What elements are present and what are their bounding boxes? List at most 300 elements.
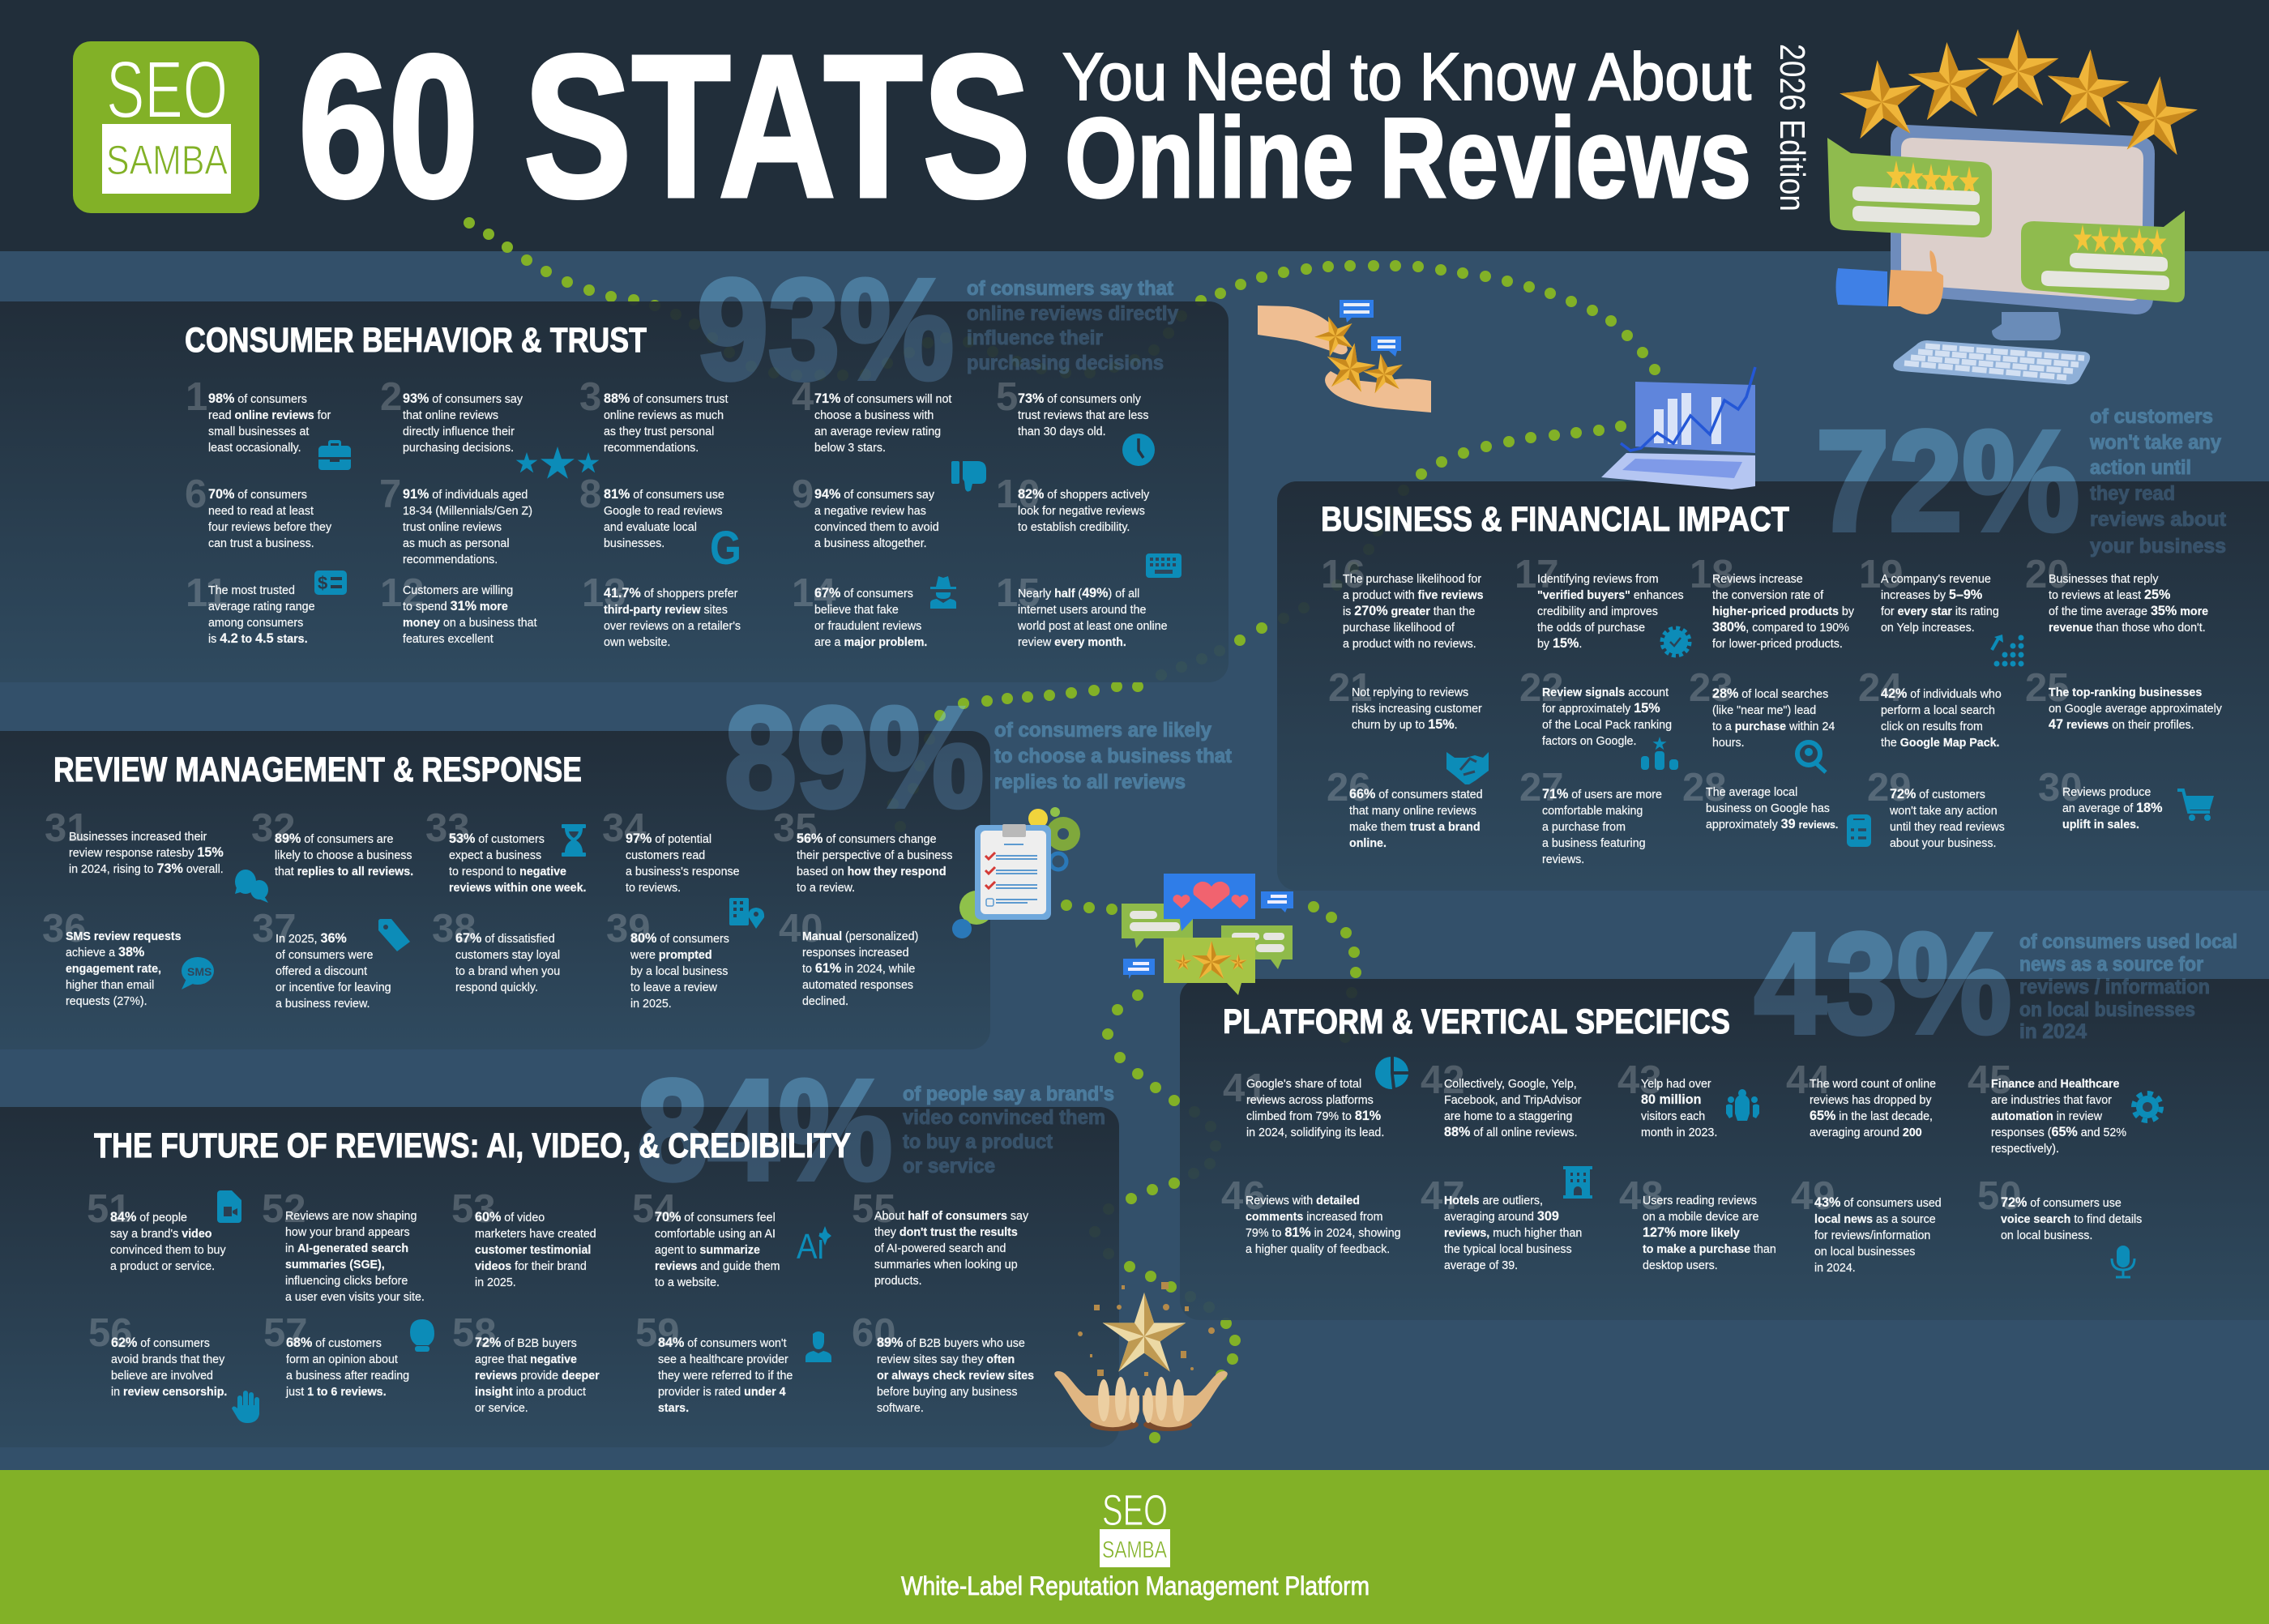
- big stat 84%: of people say a brand's: [903, 1083, 1114, 1105]
- stat 56: believe are involved: [111, 1369, 213, 1383]
- big stat 93%: [697, 250, 1178, 409]
- stat 27: reviews.: [1542, 853, 1584, 866]
- stat 47: reviews, much higher than: [1444, 1226, 1582, 1240]
- stat 4: choose a business with: [814, 408, 934, 422]
- stat 18: 18: [1690, 553, 1734, 596]
- icon: hotel: [1563, 1166, 1592, 1199]
- big stat 43%: in 2024: [2019, 1020, 2087, 1043]
- icon: price list: [314, 571, 347, 595]
- stat 53: 60% of video: [475, 1209, 545, 1224]
- stat 48: on a mobile device are: [1643, 1210, 1758, 1224]
- stat 45: responses (65% and 52%: [1991, 1124, 2126, 1139]
- big stat 43%: of consumers used local: [2019, 930, 2237, 953]
- stat 53: in 2025.: [475, 1276, 516, 1289]
- stat 2: [380, 375, 523, 455]
- stat 37: [252, 915, 397, 1012]
- stat 1: read online reviews for: [208, 408, 331, 422]
- stat 48: [1619, 1182, 1783, 1274]
- stat 39: 80% of consumers: [630, 930, 729, 946]
- stat 16: purchase likelihood of: [1343, 621, 1455, 635]
- heading: business impact: BUSINESS & FINANCIAL IMPACT: [1321, 500, 1789, 539]
- panel: future of reviews: [0, 1107, 1119, 1447]
- stat 60: 89% of B2B buyers who use: [877, 1335, 1025, 1350]
- stat 2: purchasing decisions.: [403, 441, 514, 455]
- stat 6: 70% of consumers: [208, 486, 307, 502]
- icon: local search: [1797, 742, 1826, 772]
- stat 50: voice search to find details: [2001, 1212, 2142, 1226]
- stat 17: "verified buyers" enhances: [1537, 588, 1684, 602]
- icon: spy: [930, 576, 956, 609]
- stat 14: or fraudulent reviews: [814, 619, 921, 633]
- stat 36: achieve a 38%: [66, 944, 144, 959]
- stat 38: to a brand when you: [455, 964, 560, 978]
- illustration: clipboard with gears: [952, 807, 1080, 938]
- stat 40: automated responses: [802, 978, 913, 992]
- stat 19: A company's revenue: [1881, 572, 1991, 586]
- big stat 43%: on local businesses: [2019, 998, 2195, 1021]
- stat 42: 42: [1421, 1058, 1465, 1102]
- stat 23: (like "near me") lead: [1712, 703, 1816, 717]
- stat 36: engagement rate,: [66, 962, 161, 976]
- logo: SAMBA: [106, 137, 228, 183]
- stat 18: Reviews increase: [1712, 572, 1803, 586]
- stat 58: [452, 1319, 606, 1417]
- stat 18: higher-priced products by: [1712, 605, 1854, 618]
- stat 60: [852, 1319, 1042, 1417]
- stat 35: their perspective of a business: [797, 848, 952, 862]
- icon: shopping cart: [2177, 790, 2214, 821]
- stat 45: Finance and Healthcare: [1991, 1077, 2119, 1091]
- stat 56: 62% of consumers: [111, 1335, 210, 1350]
- stat 59: they were referred to if the: [658, 1369, 793, 1383]
- stat 36: requests (27%).: [66, 994, 147, 1008]
- review bubble right: [2021, 211, 2185, 302]
- stat 25: 25: [2025, 666, 2070, 710]
- icon: keyboard: [1146, 553, 1182, 578]
- stat 49: in 2024.: [1814, 1261, 1856, 1275]
- stat 49: local news as a source: [1814, 1212, 1936, 1226]
- stat 15: world post at least one online: [1018, 619, 1168, 633]
- stat 24: perform a local search: [1881, 703, 1995, 717]
- stat 16: a product with five reviews: [1343, 588, 1483, 602]
- icon: price list: $: [318, 573, 327, 593]
- illustration: computer with reviews: [1827, 29, 2201, 384]
- stat 29: 29: [1867, 766, 1912, 810]
- stat 51: 51: [87, 1187, 131, 1231]
- stat 27: [1519, 766, 1662, 866]
- stat 36: SMS review requests: [66, 930, 182, 943]
- stat 40: responses increased: [802, 946, 909, 959]
- stat 27: 27: [1519, 766, 1564, 810]
- stat 21: [1328, 666, 1482, 732]
- big stat 72%: your business: [2090, 535, 2226, 558]
- stat 3: as they trust personal: [604, 425, 714, 438]
- stat 14: are a major problem.: [814, 635, 927, 649]
- stat 7: [379, 472, 532, 566]
- stat 39: in 2025.: [630, 997, 672, 1011]
- illustration: feedback bubbles: [1122, 874, 1293, 995]
- stat 41: reviews across platforms: [1246, 1093, 1374, 1107]
- stat 14: 14: [792, 571, 836, 615]
- icon: thumbs down: [951, 461, 986, 492]
- stat 39: [606, 915, 734, 1012]
- stat 51: say a brand's video: [110, 1227, 212, 1241]
- stat 34: to reviews.: [626, 881, 681, 895]
- stat 10: 10: [996, 472, 1040, 516]
- stat 55: About half of consumers say: [874, 1209, 1028, 1223]
- stat 11: among consumers: [208, 616, 303, 630]
- stat 41: climbed from 79% to 81%: [1246, 1108, 1381, 1123]
- stat 35: 56% of consumers change: [797, 831, 937, 846]
- stat 59: 59: [635, 1311, 680, 1355]
- stat 42: [1421, 1066, 1588, 1141]
- icons: consumer behavior: [314, 434, 1182, 609]
- stat 43: month in 2023.: [1641, 1126, 1717, 1139]
- big stat 72%: reviews about: [2090, 508, 2227, 531]
- stat 12: Customers are willing: [403, 583, 513, 597]
- big stat 93%: of consumers say that: [967, 277, 1174, 300]
- stat 35: to a review.: [797, 881, 855, 895]
- icon: briefcase: [318, 440, 351, 470]
- stat 8: businesses.: [604, 536, 664, 550]
- stat 15: [996, 571, 1168, 649]
- stat 47: 47: [1421, 1174, 1465, 1218]
- stat 15: 15: [996, 571, 1040, 615]
- stat 44: [1786, 1066, 1942, 1141]
- stat 13: [582, 571, 741, 649]
- stat 3: recommendations.: [604, 441, 699, 455]
- stat 10: 82% of shoppers actively: [1018, 486, 1149, 502]
- stat 15: review every month.: [1018, 635, 1126, 649]
- stat 13: 41.7% of shoppers prefer: [604, 585, 737, 600]
- stat 11: [186, 571, 315, 646]
- stat 49: [1791, 1182, 1948, 1276]
- stat 39: to leave a review: [630, 981, 717, 994]
- stat 52: a user even visits your site.: [285, 1290, 425, 1304]
- stat 5: 73% of consumers only: [1018, 391, 1141, 406]
- stat 24: 24: [1858, 666, 1903, 710]
- stat 50: [1977, 1182, 2149, 1244]
- stat 20: Businesses that reply: [2049, 572, 2158, 586]
- stat 26: 26: [1327, 766, 1371, 810]
- stat 46: comments increased from: [1246, 1210, 1382, 1224]
- icon: gear: [2134, 1093, 2161, 1121]
- stat 55: they don't trust the results: [874, 1225, 1018, 1239]
- stat 53: [451, 1195, 603, 1291]
- stat 29: [1867, 774, 2010, 852]
- stat 57: [263, 1319, 416, 1400]
- stat 52: [262, 1195, 432, 1306]
- stat 44: 44: [1786, 1058, 1831, 1102]
- stars above the monitor: [1836, 29, 2201, 156]
- stat 26: make them trust a brand: [1349, 820, 1481, 834]
- stat 19: on Yelp increases.: [1881, 621, 1975, 635]
- stat 55: of AI-powered search and: [874, 1242, 1006, 1255]
- stat 1: 1: [186, 375, 207, 419]
- stat 54: 54: [632, 1187, 677, 1231]
- stat 60: software.: [877, 1401, 924, 1415]
- monitor: [1891, 125, 2155, 314]
- stat 16: 16: [1321, 553, 1365, 596]
- stat 25: [2025, 666, 2222, 732]
- stat 45: [1968, 1066, 2134, 1157]
- stat 31: in 2024, rising to 73% overall.: [69, 861, 224, 876]
- stat 26: that many online reviews: [1349, 804, 1476, 818]
- stat 43: 80 million: [1641, 1092, 1702, 1107]
- icon: video file: [217, 1190, 241, 1223]
- stat 5: trust reviews that are less: [1018, 408, 1149, 422]
- logo: [73, 41, 259, 213]
- big stat 84%: 84%: [637, 1051, 892, 1210]
- stat 24: click on results from: [1881, 720, 1983, 733]
- stat 23: 28% of local searches: [1712, 686, 1828, 701]
- stat 53: videos for their brand: [475, 1259, 587, 1273]
- stat 50: 72% of consumers use: [2001, 1194, 2122, 1210]
- stat 56: in review censorship.: [111, 1385, 227, 1399]
- icon: chat bubbles: [235, 870, 268, 903]
- icon: handshake: [1446, 752, 1489, 784]
- stat 27: a purchase from: [1542, 820, 1626, 834]
- stat 56: avoid brands that they: [111, 1353, 224, 1366]
- stat 12: features excellent: [403, 632, 494, 646]
- stat 18: for lower-priced products.: [1712, 637, 1843, 651]
- stat 8: 81% of consumers use: [604, 486, 724, 502]
- stat 20: [2025, 553, 2208, 635]
- thumbs up hand: [1836, 250, 1943, 314]
- stat 6: [185, 472, 332, 550]
- stat 56: 56: [88, 1311, 133, 1355]
- dotted path: [464, 217, 1660, 1443]
- stat 48: desktop users.: [1643, 1259, 1718, 1272]
- stat 21: 21: [1328, 666, 1373, 710]
- stat 11: is 4.2 to 4.5 stars.: [208, 630, 308, 646]
- big stat 72%: action until: [2090, 456, 2191, 479]
- icon: pie chart: [1375, 1057, 1408, 1089]
- stat 6: can trust a business.: [208, 536, 314, 550]
- stat 12: money on a business that: [403, 616, 537, 630]
- stat 39: were prompted: [630, 948, 712, 962]
- heading: consumer behavior: CONSUMER BEHAVIOR & TRUST: [185, 321, 647, 360]
- stat 41: Google's share of total: [1246, 1077, 1361, 1091]
- stat 51: 84% of people: [110, 1209, 187, 1224]
- stat 30: 30: [2038, 766, 2083, 810]
- stat 34: 34: [602, 806, 647, 850]
- big stat 72%: 72%: [1816, 402, 2079, 561]
- stat 37: offered a discount: [276, 964, 367, 978]
- stat 18: 380%, compared to 190%: [1712, 619, 1849, 635]
- icon: raised hand: [232, 1391, 259, 1423]
- stat 50: 50: [1977, 1174, 2022, 1218]
- stat 41: [1223, 1075, 1391, 1141]
- big stat 89%: to choose a business that: [994, 745, 1233, 767]
- stat 44: averaging around 200: [1810, 1126, 1922, 1139]
- illustration: hands holding a star: [1054, 1282, 1228, 1431]
- stat 54: comfortable using an AI: [655, 1227, 776, 1241]
- stat 58: reviews provide deeper: [475, 1369, 600, 1383]
- stat 11: average rating range: [208, 600, 315, 613]
- stat 9: [792, 472, 939, 550]
- stat 55: 55: [852, 1187, 896, 1231]
- stat 19: 19: [1859, 553, 1904, 596]
- stat 42: Facebook, and TripAdvisor: [1444, 1093, 1582, 1107]
- icon: sms bubble: [182, 957, 214, 989]
- stat 22: of the Local Pack ranking: [1542, 718, 1672, 732]
- stat 4: 71% of consumers will not: [814, 391, 951, 406]
- stat 29: until they read reviews: [1890, 820, 2005, 834]
- stat 11: 11: [186, 571, 228, 615]
- stat 40: 40: [779, 907, 823, 951]
- stat 53: customer testimonial: [475, 1243, 591, 1257]
- stat 7: as much as personal: [403, 536, 509, 550]
- panel: review management: [0, 731, 990, 1049]
- stat 8: [579, 472, 724, 550]
- stat 3: [579, 375, 728, 455]
- big stat 89%: [724, 678, 1233, 837]
- stat 27: comfortable making: [1542, 804, 1643, 818]
- big stat 43%: [1754, 904, 2237, 1063]
- icon: star rating bars: [1641, 737, 1678, 770]
- stat 16: a product with no reviews.: [1343, 637, 1476, 651]
- stat 7: 7: [379, 472, 401, 516]
- big stat 93%: 93%: [697, 250, 954, 409]
- stat 55: summaries when looking up: [874, 1258, 1018, 1271]
- stat 60: review sites say they often: [877, 1353, 1015, 1366]
- stat 34: 97% of potential: [626, 831, 711, 846]
- icon: three stars: [516, 447, 599, 479]
- stat 15: internet users around the: [1018, 603, 1146, 617]
- big stat 72%: of customers: [2090, 405, 2213, 428]
- stat 49: for reviews/information: [1814, 1229, 1930, 1242]
- stat 26: [1327, 766, 1483, 850]
- stat 5: [996, 375, 1149, 438]
- screen: [1901, 138, 2143, 301]
- stat 55: [852, 1195, 1036, 1289]
- stat 23: 23: [1689, 666, 1733, 710]
- stat 49: 49: [1791, 1174, 1835, 1218]
- icon: google g: G: [710, 522, 741, 575]
- stat 32: that replies to all reviews.: [275, 865, 413, 878]
- stat 42: 88% of all online reviews.: [1444, 1124, 1578, 1139]
- stat 19: increases by 5–9%: [1881, 587, 1982, 602]
- stat 7: 91% of individuals aged: [403, 486, 528, 502]
- stat 38: 67% of dissatisfied: [455, 930, 555, 946]
- stat 7: 18-34 (Millennials/Gen Z): [403, 504, 532, 518]
- stat 25: 47 reviews on their profiles.: [2049, 716, 2194, 732]
- stat 3: online reviews as much: [604, 408, 724, 422]
- stat 33: reviews within one week.: [449, 881, 586, 895]
- stat 30: Reviews produce: [2062, 785, 2151, 799]
- stat 31: Businesses increased their: [69, 830, 207, 844]
- main blue band: [0, 251, 2269, 1470]
- stat 33: 53% of customers: [449, 831, 545, 846]
- stat 50: on local business.: [2001, 1229, 2092, 1242]
- footer logo: SAMBA: [1102, 1537, 1168, 1563]
- stat 11: The most trusted: [208, 583, 295, 597]
- stat 33: to respond to negative: [449, 865, 566, 878]
- stat 16: is 270% greater than the: [1343, 603, 1475, 618]
- stat 57: form an opinion about: [286, 1353, 398, 1366]
- stat 51: a product or service.: [110, 1259, 215, 1273]
- stat 47: average of 39.: [1444, 1259, 1518, 1272]
- stat 59: stars.: [658, 1401, 689, 1415]
- stat 30: [2038, 774, 2168, 833]
- stat 33: 33: [425, 806, 470, 850]
- stat 41: in 2024, solidifying its lead.: [1246, 1126, 1384, 1139]
- stat 27: 71% of users are more: [1542, 786, 1662, 801]
- stat 14: 67% of consumers: [814, 585, 913, 600]
- stat 37: a business review.: [276, 997, 370, 1011]
- icon: clock: [1122, 434, 1155, 466]
- stat 27: a business featuring: [1542, 836, 1646, 850]
- stat 55: products.: [874, 1274, 922, 1288]
- stat 10: look for negative reviews: [1018, 504, 1145, 518]
- stat 31: [45, 814, 232, 878]
- stat 6: need to read at least: [208, 504, 314, 518]
- stat 37: or incentive for leaving: [276, 981, 391, 994]
- icon: light bulb: [410, 1319, 434, 1352]
- stat 30: uplift in sales.: [2062, 818, 2139, 831]
- stat 28: business on Google has: [1706, 801, 1830, 815]
- icon: ai sparkle: Ai: [797, 1227, 824, 1267]
- stat 17: Identifying reviews from: [1537, 572, 1659, 586]
- stat 29: about your business.: [1890, 836, 1997, 850]
- stat 60: before buying any business: [877, 1385, 1017, 1399]
- stat 13: own website.: [604, 635, 670, 649]
- stat 44: The word count of online: [1810, 1077, 1936, 1091]
- stat 24: 42% of individuals who: [1881, 686, 2002, 701]
- stat 34: customers read: [626, 848, 705, 862]
- stat 1: 98% of consumers: [208, 391, 307, 406]
- stat 58: insight into a product: [475, 1385, 586, 1399]
- stat 60: or always check review sites: [877, 1369, 1034, 1383]
- big stat 93%: purchasing decisions: [967, 352, 1164, 374]
- stat 1: least occasionally.: [208, 441, 301, 455]
- stat 31: 31: [45, 806, 89, 850]
- stat 54: [632, 1195, 787, 1291]
- stat 43: Yelp had over: [1641, 1077, 1711, 1091]
- stat 35: based on how they respond: [797, 865, 946, 878]
- stat 29: 72% of customers: [1890, 786, 1985, 801]
- stat 47: averaging around 309: [1444, 1208, 1559, 1224]
- stat 37: In 2025, 36%: [276, 930, 347, 946]
- stat 18: [1690, 553, 1854, 651]
- icons: future of reviews: [217, 1190, 831, 1423]
- panel: consumer behavior: [0, 301, 1229, 682]
- stat 30: an average of 18%: [2062, 800, 2162, 815]
- stat 9: a negative review has: [814, 504, 926, 518]
- stat 4: below 3 stars.: [814, 441, 886, 455]
- stat 2: that online reviews: [403, 408, 498, 422]
- stat 1: small businesses at: [208, 425, 309, 438]
- stat 26: online.: [1349, 836, 1387, 850]
- stat 46: 79% to 81% in 2024, showing: [1246, 1224, 1401, 1240]
- stat 6: 6: [185, 472, 207, 516]
- keyboard: [1893, 340, 2090, 384]
- stat 40: [779, 915, 925, 1010]
- stat 32: 89% of consumers are: [275, 831, 393, 846]
- stat 52: in AI-generated search: [285, 1242, 408, 1255]
- stat 6: four reviews before they: [208, 520, 331, 534]
- stat 52: 52: [262, 1187, 306, 1231]
- big stat 72%: won't take any: [2089, 431, 2221, 454]
- stat 51: [87, 1195, 232, 1275]
- stat 46: a higher quality of feedback.: [1246, 1242, 1390, 1256]
- icon: growth dots: [1992, 635, 2024, 666]
- stat 20: to reviews at least 25%: [2049, 587, 2170, 602]
- stat 20: revenue than those who don't.: [2049, 621, 2206, 635]
- stat 49: 43% of consumers used: [1814, 1194, 1942, 1210]
- footer tagline: White-Label Reputation Management Platform: [901, 1571, 1370, 1600]
